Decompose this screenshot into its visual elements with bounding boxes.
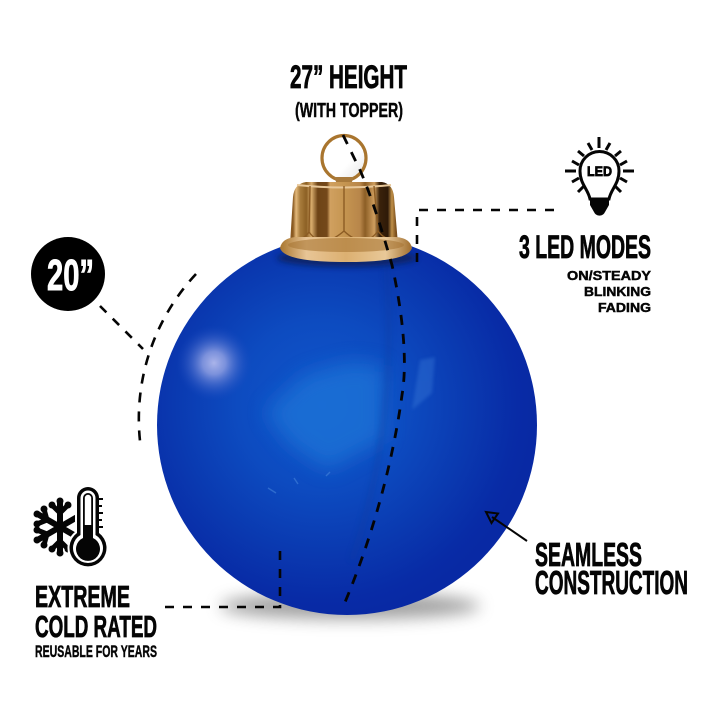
diameter badge: 20”: [47, 251, 94, 300]
icon: LED bulb: LED: [587, 163, 612, 179]
extreme heading: EXTREME: [35, 579, 130, 614]
mode: blinking: BLINKING: [584, 284, 651, 299]
with topper label: (WITH TOPPER): [295, 100, 403, 122]
rim upper edge: [288, 238, 404, 252]
topper ring: [322, 136, 366, 180]
LED modes text block: [519, 229, 651, 315]
icon: snowflake and thermometer: [34, 487, 106, 566]
cold rated heading: COLD RATED: [35, 609, 157, 644]
gold topper cap: [280, 136, 412, 262]
cap dome: [290, 182, 398, 244]
arrow to seam: [486, 512, 527, 541]
height heading: [290, 59, 407, 122]
infographic canvas: [31, 64, 687, 658]
diameter leader dashed line: [100, 306, 143, 349]
mode: fading: FADING: [598, 300, 651, 315]
reusable subtitle: REUSABLE FOR YEARS: [35, 642, 157, 661]
cold rated text block: [35, 579, 157, 661]
cold rated connector dashed line: [165, 545, 280, 607]
ring neck: [334, 177, 354, 184]
icon: LED bulb: [565, 137, 634, 216]
diameter arc dashed line: [139, 274, 196, 441]
snowflake: [34, 498, 82, 556]
ornament drop shadow: [220, 593, 480, 619]
seamless heading: SEAMLESS: [535, 536, 642, 573]
mode: on/steady: ON/STEADY: [567, 268, 651, 283]
cap scallop trim: [293, 186, 397, 241]
seamless construction text block: [535, 536, 688, 601]
cap top highlight: [297, 185, 391, 188]
thermometer: [70, 487, 106, 566]
cap base rim: [280, 237, 412, 262]
blue ornament ball: [157, 235, 537, 615]
27 inch height label: 27” HEIGHT: [290, 59, 407, 95]
seam dashed line: [343, 135, 404, 607]
diameter badge: [31, 237, 105, 311]
LED connector dashed line: [417, 210, 563, 262]
